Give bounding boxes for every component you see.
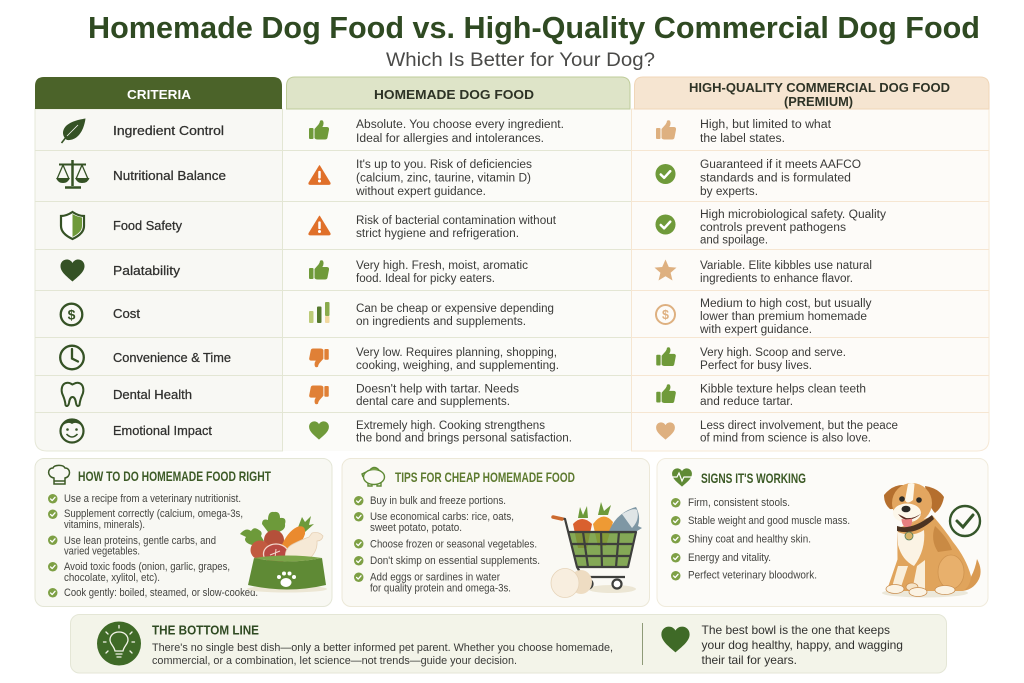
commercial: convenience text: Very high. Scoop and serve. [700, 347, 846, 359]
icon: star [654, 260, 676, 280]
checklist: chocolate, xylitol, etc). [64, 572, 160, 584]
checklist: Add eggs or sardines in water [370, 572, 500, 584]
checklist: sweet potato, potato. [370, 522, 462, 534]
commercial: palatability text: ingredients to enhance flavor. [700, 273, 853, 285]
icon: thumbs down [309, 348, 329, 367]
commercial: emotional text: of mind from science is also love. [700, 432, 871, 444]
icon: clock [60, 346, 84, 369]
homemade: dental text: dental care and supplements. [356, 396, 510, 408]
bottom line text: There's no single best dish—only a better informed pet parent. Whether you choose homemade, [152, 642, 613, 654]
checklist: Energy and vitality. [688, 552, 771, 564]
homemade: dental text: Doesn't help with tartar. Needs [356, 384, 519, 396]
homemade: palatability text [356, 260, 528, 285]
commercial: cost text [699, 298, 872, 336]
heading: TIPS FOR CHEAP HOMEMADE FOOD [395, 469, 575, 485]
closing message [702, 623, 903, 667]
paw print [277, 572, 296, 587]
homemade: food safety text [356, 215, 557, 240]
commercial: convenience text: Perfect for busy lives. [700, 360, 812, 372]
checklist: Cook gently: boiled, steamed, or slow-cooked. [64, 587, 258, 599]
title: Homemade Dog Food vs. High-Quality Commercial Dog Food [88, 10, 980, 45]
label: convenience and time: Convenience & Time [113, 351, 231, 365]
commercial: cost text: with expert guidance. [699, 324, 812, 336]
icon: dollar: $ [68, 306, 76, 322]
commercial: nutritional text: Guaranteed if it meets AAFCO [700, 159, 861, 171]
checklist: Supplement correctly (calcium, omega-3s, [64, 508, 243, 520]
checklist: Use lean proteins, gentle carbs, and [64, 535, 216, 547]
commercial: ingredient control text: High, but limited to what [700, 119, 832, 131]
heading: SIGNS IT'S WORKING [701, 470, 806, 486]
homemade: emotional text: the bond and brings personal satisfaction. [356, 432, 572, 444]
homemade: convenience text: cooking, weighing, and supplementing. [356, 360, 559, 372]
checklist: Use economical carbs: rice, oats, [370, 511, 514, 523]
checklist: Don't skimp on essential supplements. [370, 555, 540, 567]
closing message: their tail for years. [702, 653, 797, 667]
heading: THE BOTTOM LINE [152, 622, 259, 638]
commercial: cost text: lower than premium homemade [700, 311, 867, 323]
homemade: nutritional balance text [355, 159, 532, 198]
commercial: food safety text: High microbiological safety. Quality [700, 209, 886, 221]
checklist: Perfect veterinary bloodwork. [688, 570, 817, 582]
homemade: emotional text [356, 420, 572, 444]
commercial: food safety text [700, 209, 886, 246]
commercial: nutritional text [700, 159, 861, 198]
checklist: Avoid toxic foods (onion, garlic, grapes, [64, 561, 230, 573]
icon: dollar [61, 304, 82, 325]
homemade: palatability text: food. Ideal for picky eaters. [356, 273, 495, 285]
icon: chef hat [49, 465, 70, 484]
icon: bars [309, 302, 330, 323]
homemade: nutritional balance text: It's up to you. Risk of deficiencies [356, 159, 532, 171]
commercial: ingredient control text [700, 119, 832, 145]
homemade: cost text [356, 303, 554, 328]
commercial: food safety text: controls prevent pathogens [700, 222, 846, 234]
homemade: emotional text: Extremely high. Cooking strengthens [356, 420, 545, 432]
checklist [48, 493, 258, 599]
comparison table [35, 77, 989, 451]
panel: criteria column: CRITERIA [127, 87, 192, 102]
label: ingredient control: Ingredient Control [113, 124, 224, 138]
panel: commercial column: (PREMIUM) [784, 94, 853, 109]
homemade: cost text: on ingredients and supplements. [356, 316, 526, 328]
checklist [671, 497, 850, 582]
checklist [354, 495, 540, 594]
homemade: ingredient control text: Ideal for allergies and intolerances. [356, 133, 544, 145]
illustration: happy dog [882, 483, 981, 598]
homemade: palatability text: Very high. Fresh, moist, aromatic [356, 260, 528, 272]
homemade: cost text: Can be cheap or expensive depending [356, 303, 554, 315]
icon: thumbs up green [656, 347, 676, 366]
commercial: cost text: Medium to high cost, but usually [700, 298, 872, 310]
label: emotional impact: Emotional Impact [113, 424, 213, 438]
commercial: palatability text: Variable. Elite kibbles use natural [700, 260, 872, 272]
bottom line text: commercial, or a combination, let science—not trends—guide your decision. [152, 655, 517, 667]
commercial: nutritional text: by experts. [700, 186, 758, 198]
label: nutritional balance: Nutritional Balance [113, 169, 226, 183]
panel: homemade column: HOMEMADE DOG FOOD [374, 87, 534, 102]
commercial: nutritional text: standards and is formulated [700, 172, 851, 184]
icon: check [655, 214, 676, 235]
icon: warning [309, 166, 330, 184]
icon: heart [60, 260, 85, 281]
icon: dollar tan [656, 305, 675, 324]
commercial: ingredient control text: the label states. [700, 133, 785, 145]
icon: check [655, 164, 676, 184]
checklist: Choose frozen or seasonal vegetables. [370, 538, 537, 550]
homemade: ingredient control text: Absolute. You choose every ingredient. [356, 119, 564, 131]
heading: HOW TO DO HOMEMADE FOOD RIGHT [78, 468, 271, 484]
icon: thumbs up tan [656, 120, 676, 140]
closing message: your dog healthy, happy, and wagging [702, 638, 903, 652]
checklist: Stable weight and good muscle mass. [688, 515, 850, 527]
label: dental health: Dental Health [113, 388, 192, 402]
bottom line text [152, 642, 613, 667]
commercial: dental text: Kibble texture helps clean teeth [700, 384, 866, 396]
icon: dollar tan: $ [662, 308, 669, 322]
icon: scales [56, 160, 90, 188]
illustration: food bowl [240, 512, 327, 592]
icon: check ring [950, 506, 980, 536]
closing message: The best bowl is the one that keeps [702, 623, 890, 637]
icon: shield [61, 212, 84, 239]
icon: heart tan [656, 422, 675, 440]
panel: the bottom line [70, 614, 946, 673]
checklist: Shiny coat and healthy skin. [688, 534, 811, 546]
icon: thumbs up green [309, 260, 329, 280]
icon: heart green [309, 421, 329, 440]
icon: tooth [62, 383, 83, 406]
panel: criteria column [35, 77, 282, 451]
subtitle: Which Is Better for Your Dog? [386, 49, 655, 71]
homemade: nutritional balance text: (calcium, zinc, taurine, vitamin D) [356, 172, 531, 184]
panel: tips for cheap homemade food [342, 458, 650, 606]
commercial: emotional text: Less direct involvement, but the peace [700, 420, 898, 432]
checklist: for quality protein and omega-3s. [370, 582, 511, 594]
icon: thumbs down [309, 385, 329, 404]
commercial: convenience text [700, 347, 846, 372]
icon: heart [661, 627, 690, 652]
label: food safety: Food Safety [113, 219, 183, 233]
commercial: emotional text [700, 420, 898, 444]
homemade: convenience text [356, 347, 559, 372]
commercial: palatability text [700, 260, 872, 285]
checklist: Use a recipe from a veterinary nutritionist. [64, 493, 241, 505]
panel: commercial column [632, 77, 989, 451]
homemade: convenience text: Very low. Requires planning, shopping, [356, 347, 557, 359]
label: palatability: Palatability [113, 264, 181, 278]
panel: signs it's working [657, 458, 988, 606]
commercial: dental text [700, 384, 866, 408]
icon: piggy bank [362, 468, 384, 486]
homemade: ingredient control text [356, 119, 564, 145]
homemade: dental text [356, 384, 519, 408]
illustration: shopping cart [551, 502, 642, 598]
icon: warning [309, 216, 330, 235]
icon: heart with pulse [670, 468, 694, 487]
homemade: nutritional balance text: without expert guidance. [355, 186, 486, 198]
panel: commercial column: HIGH-QUALITY COMMERCIAL DOG FOOD [689, 80, 950, 95]
checklist: varied vegetables. [64, 546, 140, 558]
checklist: Buy in bulk and freeze portions. [370, 495, 506, 507]
label: cost: Cost [113, 307, 141, 321]
panel: how to do homemade food right [35, 458, 332, 606]
checklist: vitamins, minerals). [64, 519, 145, 531]
commercial: dental text: and reduce tartar. [700, 396, 793, 408]
checklist: Firm, consistent stools. [688, 497, 790, 509]
icon: leaf [62, 118, 86, 143]
icon: thumbs up green [309, 120, 329, 140]
icon: thumbs up green [656, 384, 676, 403]
homemade: food safety text: strict hygiene and refrigeration. [356, 228, 519, 240]
icon: smiling face [60, 419, 84, 442]
panel: homemade column [282, 77, 632, 451]
homemade: food safety text: Risk of bacterial contamination without [356, 215, 557, 227]
commercial: food safety text: and spoilage. [700, 234, 768, 246]
icon: light bulb badge [97, 622, 141, 666]
